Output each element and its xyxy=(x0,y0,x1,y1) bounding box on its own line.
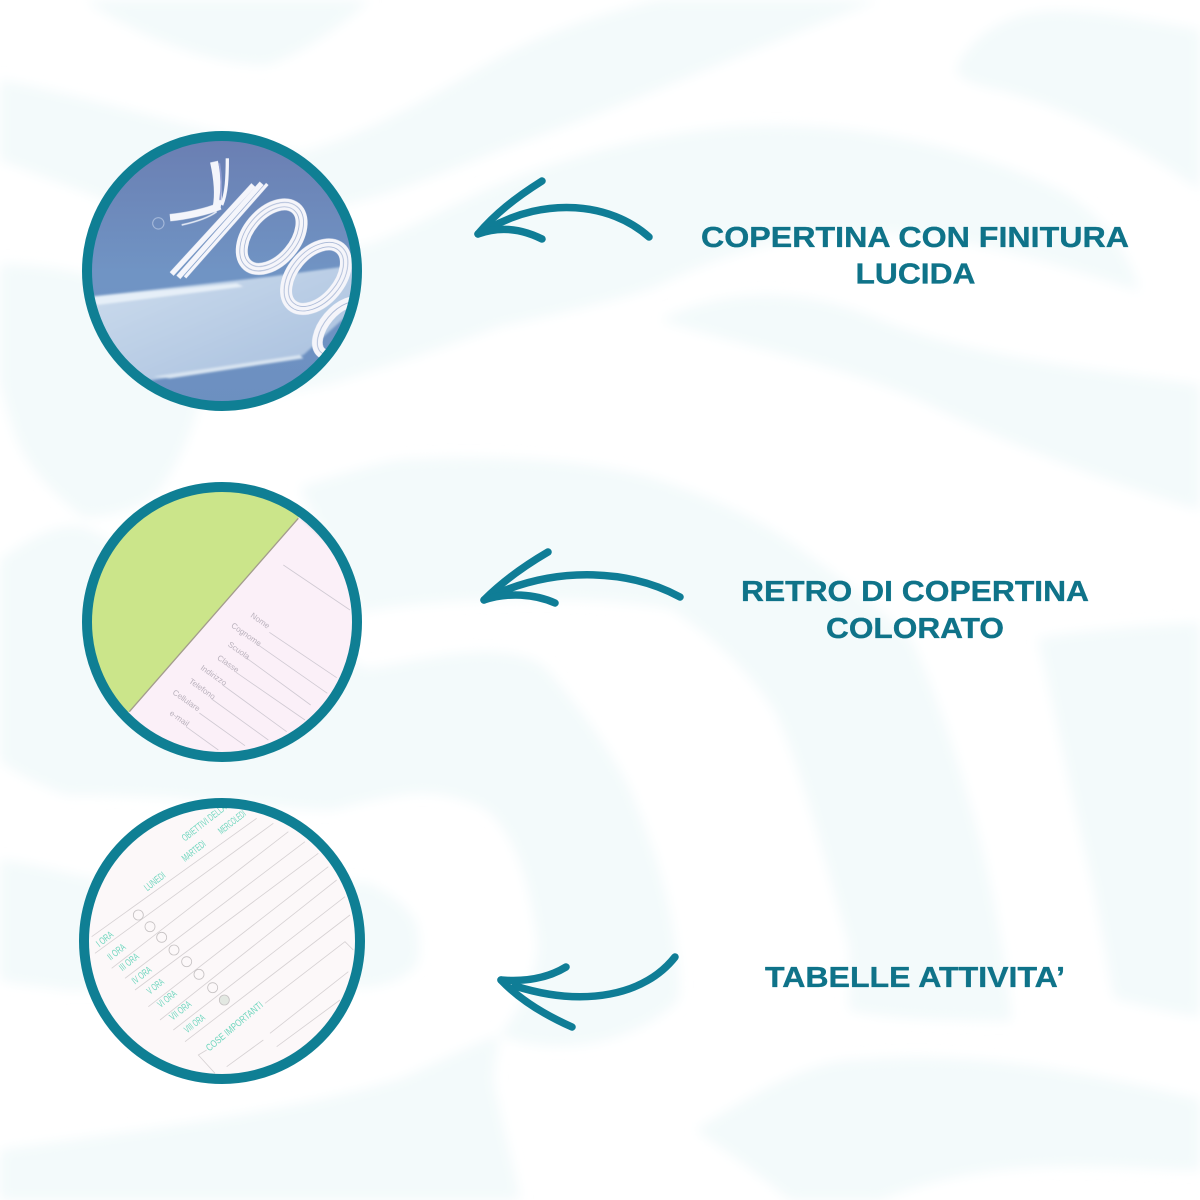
photo circle: coloured back cover: Cellulare xyxy=(171,688,202,714)
label: coloured back cover: COLORATO xyxy=(826,613,1004,645)
photo circle: activity tables: I ORA xyxy=(94,929,116,950)
photo circle: activity tables xyxy=(75,795,370,1090)
photo circle: activity tables: VII ORA xyxy=(168,999,194,1023)
photo circle: activity tables: IV ORA xyxy=(130,965,154,987)
photo circle: activity tables: II ORA xyxy=(106,942,128,963)
photo circle: coloured back cover: Scuola xyxy=(226,640,252,662)
arrow to glossy cover label xyxy=(478,181,649,239)
arrow to activity tables label xyxy=(501,957,675,1027)
label: coloured back cover xyxy=(741,576,1089,645)
photo circle: coloured back cover: Nome xyxy=(249,611,272,631)
photo circle: activity tables: MERCOLEDI xyxy=(216,809,248,837)
photo circle: activity tables: LUNEDI xyxy=(142,870,168,894)
photo circle: activity tables: MARTEDI xyxy=(180,839,208,864)
photo circle: activity tables: OBIETTIVI DELLA xyxy=(180,802,229,844)
photo circle: coloured back cover: Telefono xyxy=(187,677,218,702)
photo circle: coloured back cover: Cognome xyxy=(230,621,263,648)
photo circle: coloured back cover: e-mail xyxy=(168,709,191,729)
photo circle: coloured back cover: Indirizzo xyxy=(199,663,229,688)
photo circle: coloured back cover xyxy=(77,475,365,765)
photo circle: glossy cover xyxy=(80,130,375,415)
label: coloured back cover: RETRO DI COPERTINA xyxy=(741,576,1089,608)
label: glossy cover xyxy=(701,222,1129,290)
photo circle: activity tables: V ORA xyxy=(145,977,167,997)
photo circle: activity tables: III ORA xyxy=(117,951,142,974)
label: activity tables: TABELLE ATTIVITA’ xyxy=(765,962,1065,994)
photo circle: activity tables: COSE IMPORTANTI xyxy=(204,1000,266,1054)
photo circle: coloured back cover: Classe xyxy=(216,653,241,675)
arrow to coloured back cover label xyxy=(484,552,680,603)
label: glossy cover: COPERTINA CON FINITURA xyxy=(701,222,1129,254)
label: glossy cover: LUCIDA xyxy=(856,258,976,290)
photo circle: activity tables: VI ORA xyxy=(156,988,179,1010)
photo circle: activity tables: VIII ORA xyxy=(182,1013,208,1036)
